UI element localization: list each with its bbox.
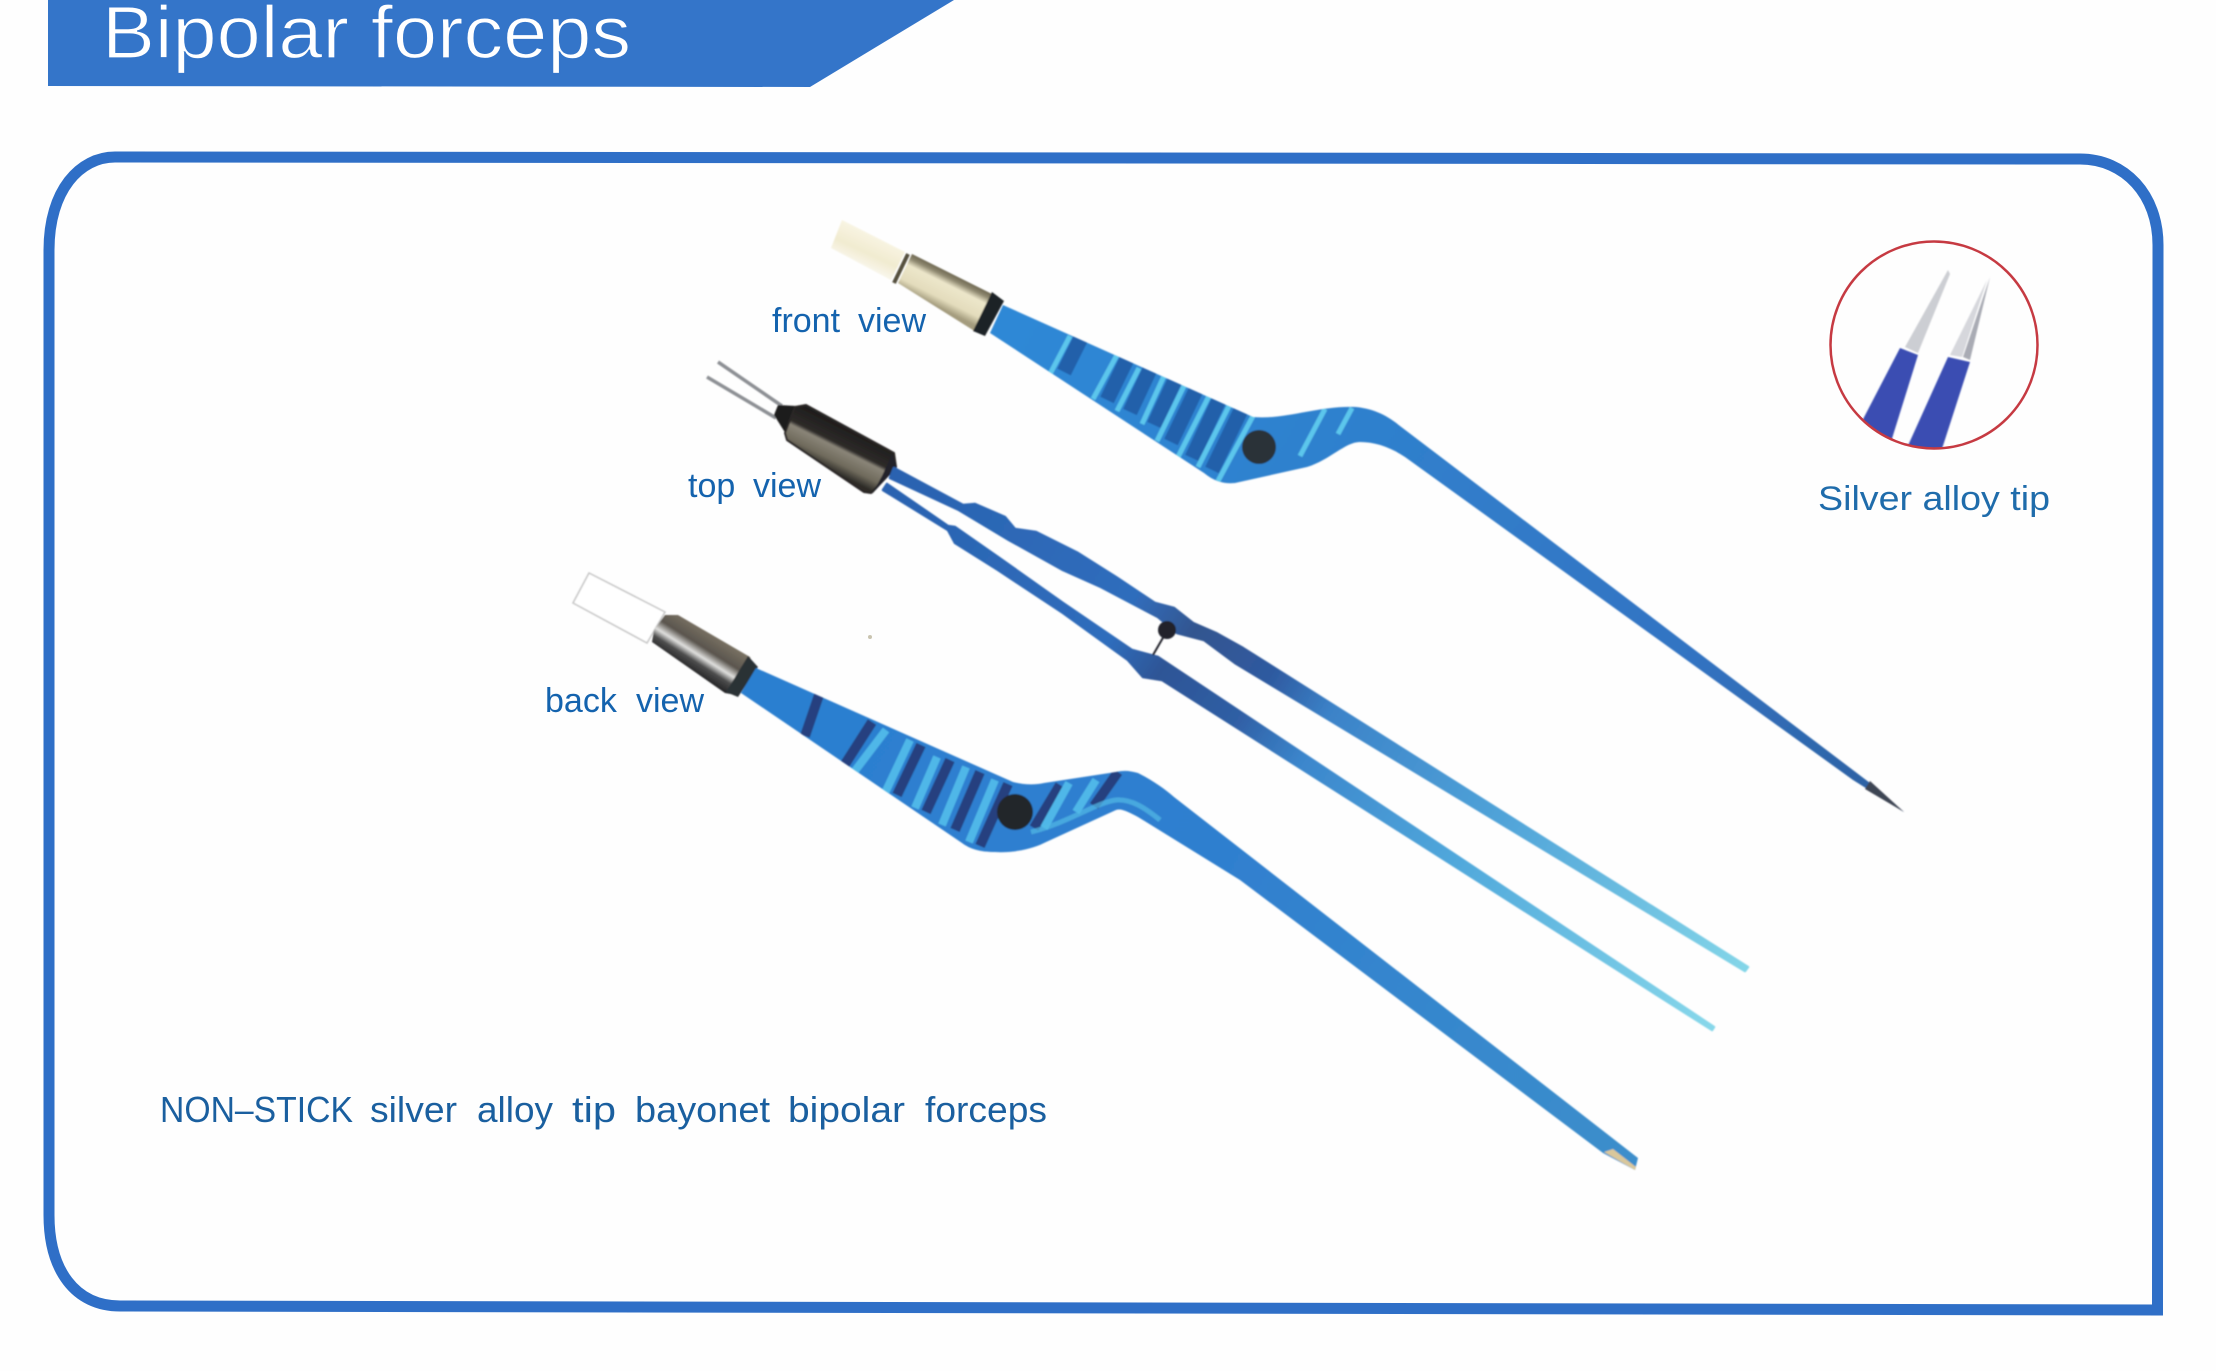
grip ridges <box>1050 336 1352 481</box>
silver tip end <box>1604 1149 1636 1170</box>
handle and shaft <box>990 305 1904 812</box>
handle and shaft <box>741 668 1638 1170</box>
dark tip <box>1865 781 1904 812</box>
forceps: top view <box>707 362 1748 1030</box>
caption: Silver alloy tip <box>1818 480 2050 518</box>
inset: silver alloy tip <box>1818 242 2050 518</box>
black collar <box>774 405 797 434</box>
label: top view: view <box>753 467 821 505</box>
product description: NON–STICK <box>160 1089 353 1130</box>
connector plug <box>831 220 905 280</box>
forceps: front view <box>831 220 1904 812</box>
ferrule <box>898 254 994 332</box>
connector plug <box>573 573 665 643</box>
label: front view: front <box>772 302 841 340</box>
product description: tip <box>572 1089 616 1130</box>
product description: bayonet <box>635 1089 770 1130</box>
banner shape <box>48 0 954 87</box>
title banner <box>48 0 954 87</box>
product description: bipolar <box>788 1089 905 1130</box>
ferrule <box>785 405 896 493</box>
speck <box>868 635 872 639</box>
lower arm <box>883 484 1714 1030</box>
grip ridges <box>805 695 1160 846</box>
label: back view: back <box>545 682 618 720</box>
label: back view: view <box>636 682 704 720</box>
forceps: back view <box>573 573 1638 1170</box>
connector pins <box>707 362 782 418</box>
tip illustration <box>1860 270 1990 455</box>
ferrule end ring <box>973 292 1004 336</box>
label: top view: top <box>688 467 735 505</box>
product description: silver <box>370 1089 457 1130</box>
product description: alloy <box>477 1089 553 1130</box>
view labels <box>545 302 926 720</box>
product description: forceps <box>925 1089 1047 1130</box>
collar ring <box>894 254 908 283</box>
upper arm <box>890 468 1748 971</box>
label: front view: view <box>858 302 926 340</box>
pivot screw <box>1242 430 1276 464</box>
pivot pin <box>1153 621 1176 655</box>
ferrule <box>652 615 754 695</box>
pivot screw <box>997 794 1033 830</box>
ferrule end <box>872 454 897 494</box>
ferrule end ring <box>726 656 758 697</box>
red circle <box>1830 242 2038 448</box>
